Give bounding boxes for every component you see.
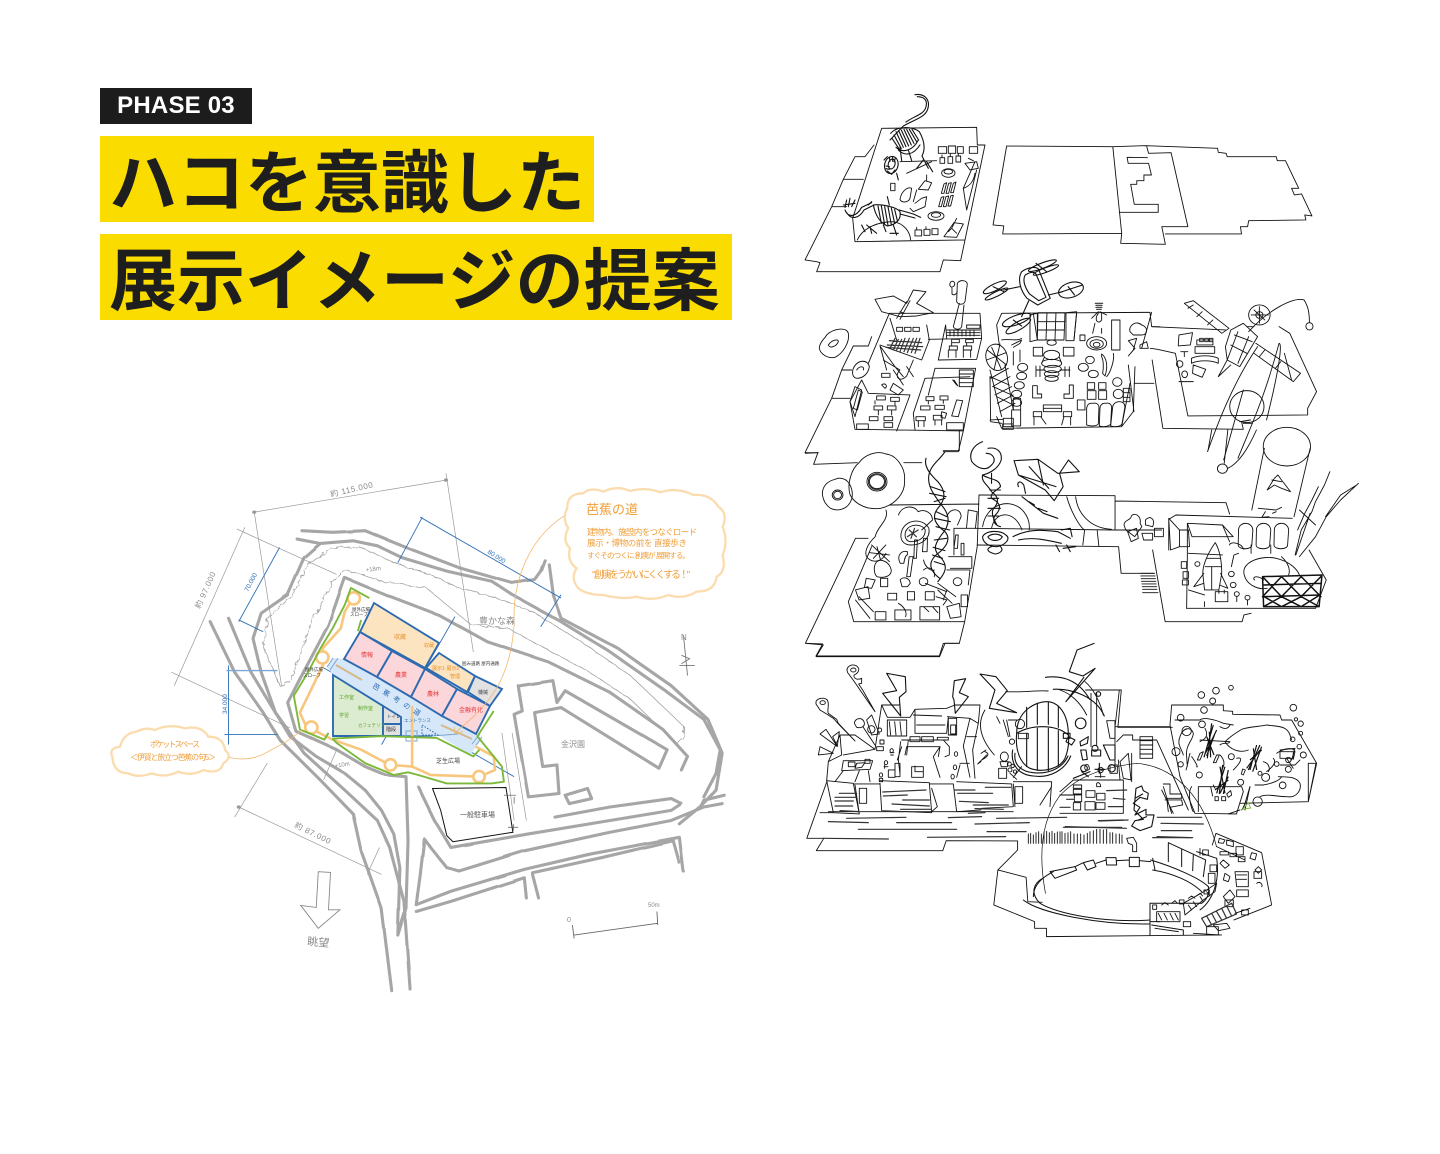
site blocks colored zones [327,603,502,755]
gray handwritten annotations: 金沢園 [561,739,585,749]
zone: gray service [468,676,502,706]
site plan sketch [110,473,727,992]
gray handwritten annotations: 芝生広場 [436,757,460,765]
lightning strands [1295,472,1358,557]
spiral dna tower [971,442,1008,554]
desks [850,339,973,430]
callout: basho road: 芭蕉の道 [586,502,638,517]
audience chairs top [886,338,923,353]
dimension lines [171,473,695,938]
callout: basho road: 建物内、施設内をつなぐロード [587,526,697,537]
green site boundary [229,510,573,783]
plan labels: スロープ [350,612,368,618]
surrounding roads and buildings [210,531,724,991]
callout: basho road: すぐそのつくに 創痍が 展開する。 [587,550,690,560]
scene 4: street slab and dome [807,643,1222,937]
callout: basho road: " 創痍をうかいにくくする！" [592,568,690,581]
gallery furniture [891,146,978,237]
gray handwritten annotations: +10m [334,761,350,770]
plan labels: 収蔵 [394,633,406,641]
plan labels: 展示1·展示2 [432,666,459,672]
gray handwritten annotations: +18m [365,566,381,574]
capsule tanks [1230,523,1289,567]
plan labels: トイレ [387,714,401,719]
seating blocks front [1060,764,1127,810]
plan labels [303,606,500,733]
plan labels: 農林 [427,690,439,698]
gray handwritten annotations: 80.000 [486,549,507,565]
gray handwritten annotations: 約 97.000 [193,570,218,610]
zone: orange side [426,653,475,692]
zone: green workshop [333,675,383,736]
blob planter left [819,329,849,358]
front plinths [827,781,1052,814]
kettle display [999,719,1028,779]
figure and target [1080,303,1148,356]
rocket bottle on shelf [950,281,967,329]
orange circulation path [300,592,495,782]
wavy hedge outline [263,548,683,743]
gray handwritten annotations: 眺望 [307,935,330,950]
wall slits [828,787,1067,829]
scene 3: dna and rocket rooms [805,427,1358,657]
plan labels: 金融有化 [459,706,483,714]
scene 1b: empty upper floor [993,146,1312,244]
corridor [975,495,1230,573]
gray handwritten annotations: 50m [648,903,660,909]
phase label: PHASE 03 [117,92,235,119]
plan labels: エントランス [404,718,431,724]
plan labels: 収蔵 [424,642,434,649]
winged dinosaur [1013,459,1079,552]
plant sculptures [1204,723,1262,794]
arena shelving dense [1153,833,1272,935]
rocket [1194,543,1228,602]
gray handwritten annotations: 約 115.000 [329,479,374,499]
plan labels: 学習 [339,712,349,719]
bowl and truss [1244,557,1299,589]
ring cylinder [1012,692,1115,778]
zones: gray toilets [383,706,401,736]
dinosaur skeleton upper [883,94,933,180]
plan labels: 階段 [386,726,396,733]
gray handwritten annotations: 70.000 [244,572,259,593]
plan labels: スロープ [303,673,321,679]
stairs [1141,573,1158,593]
gray handwritten annotations [193,479,687,950]
plan labels: 制作室 [358,705,373,712]
phase label [100,88,252,124]
gray handwritten annotations: 豊かな森 [479,615,515,626]
zone: light blue road [327,658,482,755]
mid plants [1124,514,1163,542]
lower drone rotor [1001,310,1032,336]
dinosaur skeleton lower [843,197,921,235]
lattice tower [983,338,1022,417]
scene 4: lightning hall left [807,643,1067,829]
right room walls [990,312,1160,428]
cylinder top and figure [1263,427,1311,466]
scene 2: floating drone and science rooms [805,281,1160,453]
arena [1023,843,1218,935]
plan labels: 機械 [478,689,488,696]
gray handwritten annotations: 約 87.000 [293,820,333,846]
callout: pocket space: ポケットスペース [150,740,200,749]
plan labels: カフェテリア [358,723,385,729]
gray handwritten annotations: 0 [567,917,571,924]
plan labels: 屋外広場 [352,606,370,613]
plan labels: 情報 [361,651,373,659]
table [835,759,873,782]
plan labels: 囲み道路 屋内通路 [462,660,500,667]
callout: pocket space [111,726,229,776]
inner gallery [888,737,949,777]
callout: basho road [565,488,725,599]
shelf wall grid [1030,312,1077,342]
lightning bolts [883,673,906,716]
title line 2: 展示イメージの提案 [109,226,720,325]
plant blobs [866,507,961,561]
scene 2b: satellite room [1134,299,1317,460]
left hall walls [827,705,980,781]
plan labels: 農業 [395,671,407,679]
right room [1153,515,1326,622]
scene 4: bubble garden room [1170,685,1317,814]
crumpled sculpture [1132,786,1154,831]
title line 1: ハコを意識した [109,128,585,227]
gray handwritten annotations: 34.000 [222,694,229,714]
cell clouds [849,453,905,509]
plan labels: 工作室 [339,694,354,701]
tiered display and seating [1003,340,1134,429]
road lines [333,735,432,737]
gray handwritten annotations: N [681,633,687,642]
plan labels: 屋外広場 [305,666,323,673]
scene 4: central ring hall [1012,682,1272,935]
plane sketch [875,290,933,319]
dna strand [926,452,950,582]
smoke shapes [847,665,875,712]
shelf and stairs center [1115,727,1188,810]
fence row [1028,829,1122,844]
zones: pink galleries [344,632,490,734]
circular bowls [855,560,968,620]
drone body and rotors [982,258,1086,317]
bubbles [1172,685,1306,806]
callout: pocket space: ＜伊賀と旅立つ芭蕉の句5＞ [130,752,216,762]
plan labels: 管理 [450,673,460,680]
isometric exhibition sketches [804,94,1359,938]
scene 1: dinosaur room [805,94,985,272]
gray handwritten annotations: 一般駐車場 [460,810,495,819]
plan labels: 芭蕉考の道 [371,681,427,720]
callout: basho road: 展示・博物の前を 直接歩き [587,537,687,548]
zone: orange storage [360,603,439,668]
